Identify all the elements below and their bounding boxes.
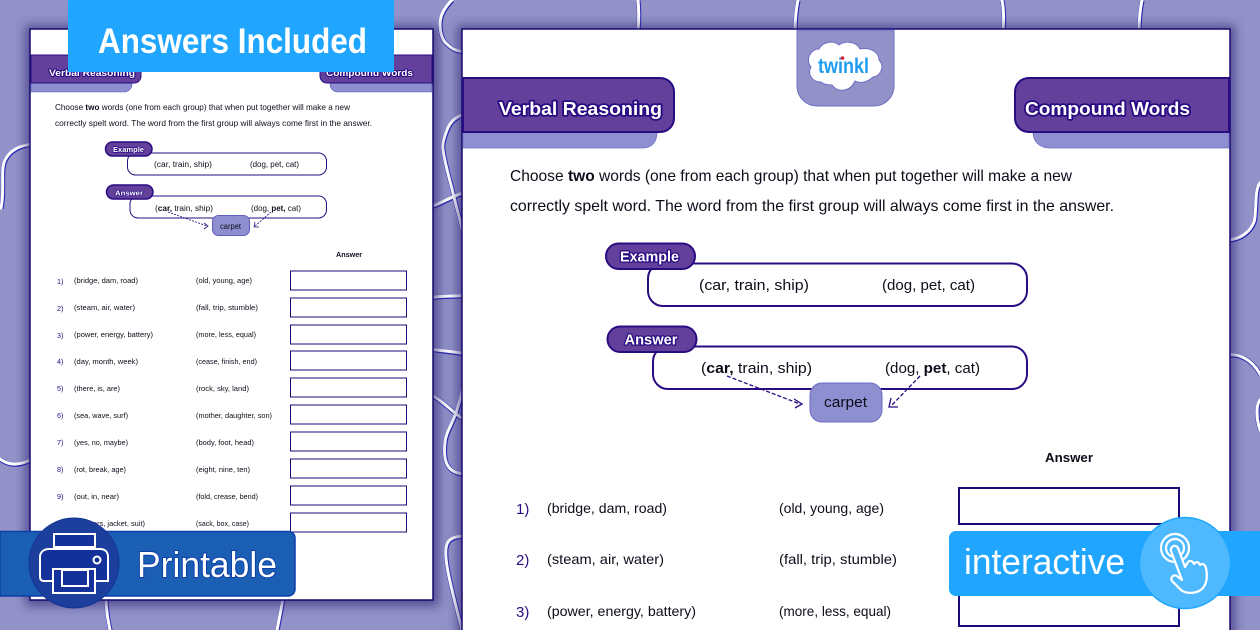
icon: twinkl cloud — [808, 42, 882, 90]
banner: interactive: interactive — [964, 541, 1125, 582]
banner: printable: Printable — [137, 544, 277, 585]
logo text: twinkl — [818, 55, 869, 78]
question list — [57, 276, 272, 528]
answer boxes — [959, 488, 1179, 626]
instructions: correctly spelt word. The word from the first group will always come first in the answer. — [55, 118, 372, 128]
question list: 3) — [57, 331, 63, 340]
question list: (yes, no, maybe) — [74, 438, 128, 447]
answer box: Answer — [624, 332, 678, 348]
icon: printer — [29, 518, 119, 608]
instructions — [55, 102, 372, 128]
carpet chip: carpet — [824, 394, 868, 411]
question list: 1) — [57, 277, 63, 286]
question list: (body, foot, head) — [196, 438, 254, 447]
question list: (fall, trip, stumble) — [196, 303, 258, 312]
question list: (more, less, equal) — [779, 603, 891, 619]
question list: (old, young, age) — [196, 276, 252, 285]
question list: 9) — [57, 492, 63, 501]
question list: 2) — [516, 552, 529, 569]
question list: (steam, air, water) — [74, 303, 135, 312]
question list — [516, 500, 897, 621]
answer box: Answer — [115, 188, 143, 198]
example box: Example — [620, 248, 679, 266]
header tab: Verbal Reasoning — [31, 55, 141, 92]
banner: interactive — [949, 518, 1260, 608]
banner: answers included — [68, 0, 394, 72]
header tab: Verbal Reasoning — [463, 78, 674, 148]
instructions: Choose two words (one from each group) that when put together will make a new — [510, 168, 1072, 185]
question list: 7) — [57, 438, 63, 447]
example box — [606, 244, 1027, 306]
answer box: (dog, pet, cat) — [251, 204, 301, 213]
question list: 1) — [516, 501, 529, 518]
question list: (trousers, jacket, suit) — [74, 519, 145, 528]
instructions: Choose two words (one from each group) that when put together will make a new — [55, 102, 351, 112]
question list: (power, energy, battery) — [74, 330, 153, 339]
question list: 2) — [57, 304, 63, 313]
question list: (cease, finish, end) — [196, 357, 257, 366]
panel: zoomed worksheet page — [457, 25, 1235, 630]
example box — [106, 142, 326, 175]
example box: (dog, pet, cat) — [882, 277, 975, 294]
question list: 3) — [516, 604, 529, 621]
question list: (sack, box, case) — [196, 519, 249, 528]
question list: (steam, air, water) — [547, 551, 664, 567]
header tab: Compound Words — [1015, 78, 1229, 148]
answer box — [106, 185, 326, 236]
logo tab — [797, 30, 894, 106]
header tab: Compound Words: Compound Words — [326, 68, 413, 78]
question list: (old, young, age) — [779, 500, 884, 516]
header tab: Verbal Reasoning: Verbal Reasoning — [49, 68, 135, 78]
example box: (car, train, ship) — [699, 277, 809, 294]
icon: tapping hand — [1140, 518, 1230, 608]
header tab: Verbal Reasoning: Verbal Reasoning — [499, 98, 662, 119]
question list: (fall, trip, stumble) — [779, 551, 897, 567]
answer column heading: Answer — [1045, 450, 1093, 465]
question list: 4) — [57, 357, 63, 366]
example box: (car, train, ship) — [154, 160, 212, 169]
instructions — [510, 168, 1114, 215]
header tab: Compound Words: Compound Words — [1025, 98, 1190, 119]
answer box: (car, train, ship) — [155, 204, 213, 213]
answer box: (car, train, ship) — [701, 360, 812, 377]
answer box: carpet — [220, 222, 242, 231]
logo star — [841, 56, 844, 60]
question list: 6) — [57, 411, 63, 420]
question list: (fold, crease, bend) — [196, 492, 258, 501]
question list: (bridge, dam, road) — [547, 500, 667, 516]
question list: (out, in, near) — [74, 492, 119, 501]
carpet chip — [810, 383, 882, 422]
answer box: (dog, pet, cat) — [885, 360, 980, 377]
example box: Example — [113, 145, 144, 154]
question list: (mother, daughter, son) — [196, 411, 272, 420]
instructions: correctly spelt word. The word from the first group will always come first in the answer. — [510, 198, 1114, 215]
question list: (rot, break, age) — [74, 465, 126, 474]
question list: (sea, wave, surf) — [74, 411, 128, 420]
question list: (more, less, equal) — [196, 330, 256, 339]
example box: (dog, pet, cat) — [250, 160, 299, 169]
question list: (eight, nine, ten) — [196, 465, 250, 474]
question list: (bridge, dam, road) — [74, 276, 138, 285]
arrows — [727, 376, 920, 408]
banner: answers included: Answers Included — [98, 22, 367, 61]
answer column heading: Answer — [336, 252, 362, 259]
question list: (day, month, week) — [74, 357, 138, 366]
answer boxes — [290, 271, 406, 532]
question list: (power, energy, battery) — [547, 603, 696, 619]
question list: 5) — [57, 384, 63, 393]
question list: 8) — [57, 465, 63, 474]
banner: printable — [0, 518, 295, 608]
question list: (there, is, are) — [74, 384, 120, 393]
header tab: Compound Words — [320, 55, 432, 92]
panel: printable worksheet page — [25, 25, 439, 606]
question list: (rock, sky, land) — [196, 384, 249, 393]
answer box — [608, 326, 1027, 422]
